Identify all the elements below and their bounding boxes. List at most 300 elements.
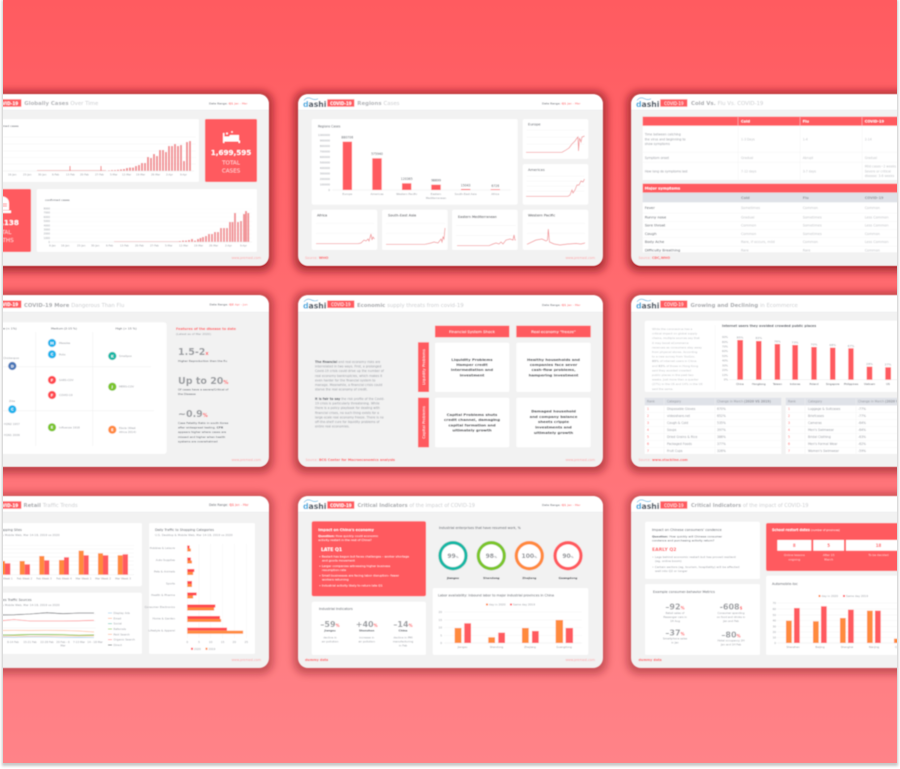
table: growing categories: Packaged Foods xyxy=(667,442,692,446)
panel: industrial indicators: –59% xyxy=(320,620,340,629)
panel: consumer confidence: Impact on Chinese consumers' condence xyxy=(652,528,722,532)
panel: impact on china economy: Impact on China's economy xyxy=(318,528,374,532)
panel: traffic bar chart: Mar Week 2 xyxy=(95,576,111,580)
panel: internet users chart: 70% xyxy=(722,344,728,348)
panel: severity matrix: M xyxy=(50,341,54,345)
table: major symptoms: Cold xyxy=(741,196,750,200)
source note: Source: CDC,WHO xyxy=(638,256,670,260)
panel: consumer behavior metrics xyxy=(645,584,760,655)
panel: automobile-toc chart: day in 2020 xyxy=(822,594,838,598)
table: growing categories xyxy=(645,398,781,454)
panel: confirmed deaths chart: 9-Apr xyxy=(240,244,248,248)
panel: consumer confidence: Question: How quickly will Chinese consumer xyxy=(652,534,722,538)
panel: industrial indicators: air pollution xyxy=(322,640,339,644)
sparkline: Western Pacific: Western Pacific xyxy=(528,214,555,218)
panel: impact on china economy: activity restart in the rest of China? xyxy=(318,538,372,542)
panel: daily traffic categories chart: Lifestyle & Apparel xyxy=(149,628,175,632)
panel: consumer behavior metrics: Passenger cars in xyxy=(663,615,687,619)
panel: automobile-toc chart: 0 xyxy=(774,641,776,645)
panel: severity matrix: High (> 15 %) xyxy=(115,327,137,331)
panel: internet users chart: it may boost eCommerce xyxy=(652,341,689,345)
panel: regions cases bar chart: 880706 xyxy=(341,136,353,140)
table: growing categories: 377% xyxy=(717,442,726,446)
panel: automobile-toc chart: Nanjing xyxy=(869,645,879,649)
table: growing categories: 6 xyxy=(647,442,649,446)
panel: industrial indicators: Industrial Indicators xyxy=(319,607,353,611)
panel: automobile-toc chart: 60 xyxy=(773,607,776,611)
table: growing categories: 5 xyxy=(647,435,649,439)
table: major symptoms: COVID-19 xyxy=(865,196,884,200)
logo dashi: dashi xyxy=(303,302,326,311)
panel: regions cases bar chart: Western Pacific xyxy=(396,192,418,196)
date range: Date Range: Q1 Jan - Mar xyxy=(542,102,581,106)
table: major symptoms: Common xyxy=(803,240,818,244)
panel: daily traffic categories chart xyxy=(145,523,255,654)
panel: severity matrix: MERS-COV xyxy=(119,385,134,389)
panel: severity matrix: D xyxy=(11,364,14,368)
table: major symptoms: Gradual xyxy=(741,216,754,220)
panel: school restart dates: To be decided xyxy=(868,553,889,557)
panel: labor availability chart: 0 xyxy=(440,641,442,645)
panel: industrial indicators: in Feb xyxy=(399,644,407,648)
panel: labor availability chart xyxy=(433,588,588,655)
table: growing categories: 326% xyxy=(717,449,726,453)
panel: automobile-toc chart: Beijing xyxy=(815,645,825,649)
panel: regions cases bar chart: 700000 xyxy=(320,150,330,154)
text: features of the disease: 1.5-2x xyxy=(178,347,209,358)
cell: capital financial: credit channel, damaging xyxy=(444,417,500,422)
panel: severity matrix: Smallpox xyxy=(119,354,132,358)
panel: impact on china economy xyxy=(312,521,426,596)
gauge: Jiangsu: 99% xyxy=(447,553,459,560)
logo dashi: dashi xyxy=(303,502,326,511)
gauge: Shandong: Shandong xyxy=(483,576,499,580)
panel: daily cases chart: 13-Feb xyxy=(66,172,75,176)
gauge: Guangdong xyxy=(555,543,581,580)
panel: internet users chart: 0% xyxy=(724,378,728,382)
header badge: COVID-19 xyxy=(331,302,351,307)
panel: severity matrix: E xyxy=(111,428,114,432)
table: declining categories: Men's Swimwear xyxy=(808,428,835,432)
panel: confirmed deaths chart: 16-Jan xyxy=(61,244,70,248)
panel: slide regions cases xyxy=(294,91,607,272)
header badge xyxy=(0,99,21,107)
panel: automobile-toc chart: Shanghai xyxy=(841,645,854,649)
panel: labor availability chart: Shandong xyxy=(490,645,504,649)
panel: consumer behavior metrics: Example consumer-behavior Metrics xyxy=(653,590,715,594)
table: declining categories: -64% xyxy=(858,428,866,432)
panel: traffic sources line chart: 22-28 Feb xyxy=(40,640,54,644)
text: features of the disease xyxy=(176,327,237,444)
table: major symptoms: Less Common xyxy=(865,216,889,220)
panel: daily traffic categories chart: Health & Pharma xyxy=(151,593,175,597)
column header: real economy freeze: Real economy "freeze" xyxy=(531,329,576,334)
panel: confirmed deaths chart: 20-Feb xyxy=(135,244,144,248)
panel: regions cases bar chart: 0 xyxy=(328,188,330,192)
panel: consumer confidence: (eg, online boom) xyxy=(655,559,682,563)
panel: traffic sources line chart: 8-14 Feb xyxy=(7,640,19,644)
panel: confirmed deaths chart: confirmed cases xyxy=(45,198,70,202)
panel: regions cases bar chart: South-East Asia xyxy=(455,192,477,196)
heading: industrial enterprises: Industrial enterprises that have resumed work, % xyxy=(439,526,521,530)
table: major symptoms: Sometimes xyxy=(803,216,822,220)
panel: daily cases chart: 19-Mar xyxy=(136,172,146,176)
panel: traffic sources line chart xyxy=(0,593,142,654)
panel: confirmed deaths chart: 1000 xyxy=(44,236,50,240)
panel: consumer behavior metrics: on food and drinks in xyxy=(717,615,746,619)
panel: traffic sources line chart: Direct xyxy=(114,643,123,647)
panel: automobile-toc chart: 50 xyxy=(773,613,776,617)
panel: labor availability chart: Labor availability: Inbound labor to major industrial provinces in China xyxy=(438,594,554,598)
gauge: Zhejiang: 100% xyxy=(522,553,537,560)
panel: internet users chart: said they avoided crowded xyxy=(652,368,691,372)
table: timing comparison: How long do symptoms last xyxy=(645,169,688,173)
panel: industrial indicators: manufacturing xyxy=(393,640,413,644)
panel: internet users chart: 27% xyxy=(885,363,891,367)
panel: internet users chart: Philippines xyxy=(844,382,859,386)
panel: consumer behavior metrics: –80% xyxy=(721,630,741,640)
sparkline: Europe: Europe xyxy=(528,122,541,126)
row header: liquidity problems xyxy=(418,342,429,392)
panel: daily traffic categories chart: 5 xyxy=(198,640,200,644)
panel: internet users chart: 30% xyxy=(722,363,728,367)
table: declining categories: Bridal Clothing xyxy=(808,435,831,439)
panel: daily traffic categories chart: Pets & Animals xyxy=(154,570,176,574)
table: timing comparison: 7-12 days xyxy=(741,169,757,173)
panel: confirmed deaths chart: 3000 xyxy=(44,228,50,232)
table: major symptoms: Major symptoms xyxy=(645,185,681,190)
panel: daily traffic categories chart: 2020 xyxy=(194,647,201,651)
gauge: Shandong: 98% xyxy=(486,553,497,560)
panel: impact on china economy: • Small businesses are facing labor disruption– fewer xyxy=(319,574,400,578)
cell: liquidity financial: investment xyxy=(460,372,485,378)
panel: daily cases chart: 20-Feb xyxy=(80,172,89,176)
panel: daily traffic categories chart: Auto Supplies xyxy=(156,558,176,562)
text: economic explanation: financial crises, no such thing exists for a xyxy=(315,411,379,415)
panel: traffic bar chart xyxy=(0,523,142,586)
panel: internet users chart: 60% xyxy=(722,349,728,353)
panel: labor availability chart: Jiangsu xyxy=(457,645,468,649)
cell: liquidity real economy: cash-flow problems, xyxy=(531,367,576,372)
table: major symptoms: Difficulty Breathing xyxy=(645,248,680,252)
panel: traffic bar chart: Feb Week 4 xyxy=(56,576,72,580)
table: growing categories: videoshare.net xyxy=(667,414,691,418)
panel: consumer confidence: • Lags behind economic restart but has proved resilient xyxy=(652,555,737,559)
panel: daily cases chart: 30-Jan xyxy=(38,172,47,176)
panel: confirmed deaths chart: 4000 xyxy=(44,223,50,227)
table: timing comparison: Severe or critical xyxy=(865,169,891,173)
panel: internet users chart: 90% xyxy=(722,335,728,339)
panel: school restart dates: After 15 xyxy=(823,553,835,557)
cell: liquidity real economy: Healthy households and xyxy=(527,357,580,362)
cell: capital financial xyxy=(435,398,509,447)
text: economic explanation: off-the-shelf cure for liquidity problems of xyxy=(315,420,380,424)
panel: regions cases bar chart: 300000 xyxy=(320,172,330,176)
panel: total cases tile: TOTAL xyxy=(221,160,241,166)
panel: consumer behavior metrics: Jan and Feb xyxy=(722,619,739,623)
panel: daily traffic categories chart: 0 xyxy=(186,640,188,644)
panel: severity matrix: F xyxy=(51,393,54,397)
text: economic explanation: entire real economies. xyxy=(315,425,350,429)
panel: school restart dates: 8 xyxy=(793,543,796,548)
sparkline: Africa: Africa xyxy=(317,213,327,217)
source note: Source: WHO xyxy=(305,256,328,260)
table: timing comparison: Gradual xyxy=(865,156,877,160)
panel: consumer confidence: condence and purchasing activity return? xyxy=(652,538,715,542)
panel: traffic sources line chart: 14 - 18 Mar xyxy=(87,640,104,644)
panel: severity matrix: Measles xyxy=(59,341,71,345)
sparkline: Western Pacific xyxy=(523,210,588,250)
panel: internet users chart: Hongkong xyxy=(752,382,766,386)
column header: financial system shock xyxy=(435,326,509,337)
panel: consumer confidence xyxy=(645,522,760,579)
panel: internet users chart: 73% xyxy=(792,340,798,344)
table: growing categories: Soups xyxy=(667,428,677,432)
sparkline: Eastern Mediterranean xyxy=(452,210,518,250)
header badge: COVID-19 xyxy=(330,503,352,508)
table: growing categories: 397% xyxy=(717,428,726,432)
table: growing categories: 535% xyxy=(717,421,726,425)
panel: consumer behavior metrics: in Jan xyxy=(671,640,679,644)
panel: regions cases bar chart: 100000 xyxy=(320,182,330,186)
table: declining categories: 2 xyxy=(788,414,790,418)
panel: school restart dates: Online lessons xyxy=(784,553,805,557)
panel: traffic sources line chart: 15-21 Feb xyxy=(23,640,37,644)
table: growing categories: 4 xyxy=(647,428,649,432)
panel: internet users chart: Poland xyxy=(810,382,819,386)
table: timing comparison: show symptoms xyxy=(645,142,670,146)
panel: impact on china economy: and goods movement xyxy=(322,558,356,562)
panel: daily traffic categories chart: Daily Traffic to Shopping Categories xyxy=(155,528,214,532)
panel: severity matrix xyxy=(0,322,167,454)
source note: Source: BCG Center for Macroeconomics analysis xyxy=(306,458,395,462)
header badge: COVID-19 xyxy=(330,101,352,106)
slide title: Globally Cases Over Time xyxy=(24,101,99,107)
panel: automobile-toc chart: 10 xyxy=(773,636,776,640)
panel: internet users chart: weeks. Just more than a quarter xyxy=(652,378,699,382)
panel: confirmed deaths chart xyxy=(37,189,257,252)
table: growing categories: 386% xyxy=(717,435,726,439)
panel: traffic sources line chart: Paid Search xyxy=(114,632,130,636)
panel: regions cases bar chart xyxy=(312,119,518,205)
panel: traffic sources line chart: 29 Feb - 6 xyxy=(56,640,70,644)
text: economic explanation: even harder for the financial system to xyxy=(315,378,376,382)
panel: confirmed deaths chart: 23-Jan xyxy=(77,244,86,248)
table: major symptoms: Runny nose xyxy=(645,216,667,220)
text: economic explanation: starve the real economy of credit. xyxy=(315,388,368,392)
column header: real economy freeze xyxy=(516,326,591,337)
panel: severity matrix: Zika xyxy=(9,399,15,403)
table: declining categories: -59% xyxy=(858,449,866,453)
logo dashi: dashi xyxy=(303,100,326,109)
panel: severity matrix: C xyxy=(51,353,54,357)
panel: impact on china economy: • Larger companies witnessing higher business xyxy=(319,564,391,568)
sparkline: Africa xyxy=(312,210,377,250)
date range: Date Range: Q1 Jan - Mar xyxy=(209,102,248,106)
panel: industrial indicators: +40% xyxy=(356,620,378,629)
panel: internet users chart: chains, multiple sources say that xyxy=(652,336,701,340)
table: declining categories: Cameras xyxy=(808,421,822,425)
cell: capital financial: Capital Problems shuts xyxy=(447,412,498,417)
panel: school restart dates: 18 xyxy=(876,543,881,548)
text: economic explanation: The financial xyxy=(315,360,337,364)
panel: consumer confidence: EARLY Q2 xyxy=(652,547,676,553)
table: major symptoms: Sometimes xyxy=(803,224,822,228)
panel: daily traffic categories chart: 25 xyxy=(245,640,248,644)
panel: confirmed deaths chart: 5000 xyxy=(44,219,50,223)
table: declining categories: 3 xyxy=(788,421,790,425)
cell: liquidity financial: intermediation and xyxy=(451,367,493,372)
panel: daily traffic categories chart: Sports xyxy=(166,582,176,586)
panel: regions cases bar chart: 600000 xyxy=(320,155,330,159)
panel: internet users chart: 67% xyxy=(848,344,854,348)
panel: confirmed deaths chart: 19-Mar xyxy=(194,244,204,248)
table: timing comparison: 1-4 xyxy=(803,137,808,141)
panel: daily traffic categories chart: 10 xyxy=(209,640,213,644)
table: major symptoms: Common xyxy=(741,232,756,236)
cell: capital real economy: sheets cripple xyxy=(538,419,569,424)
header badge xyxy=(660,99,687,107)
panel: internet users chart: to a new survey from YouGov, xyxy=(652,355,695,359)
panel: consumer behavior metrics: Hotel occupancy 2H xyxy=(718,638,744,642)
panel: labor availability chart: Zhejiang xyxy=(524,645,536,649)
gauge: Jiangsu: Jiangsu xyxy=(446,576,459,580)
panel: regions cases bar chart: 98699 xyxy=(431,178,441,182)
panel: confirmed deaths chart: 0 xyxy=(48,240,50,244)
panel: school restart dates xyxy=(766,523,900,571)
source note: dummy data xyxy=(638,658,662,662)
panel: consumer behavior metrics: Retail sales of xyxy=(666,611,684,615)
table: major symptoms: Rare, if occurs, mild xyxy=(741,240,775,244)
text: features of the disease: Of cases have a severe/Critical of xyxy=(178,388,229,392)
panel: confirmed deaths chart: 26-Mar xyxy=(209,244,219,248)
panel: internet users chart: and 83% of those in Hong Kong xyxy=(652,364,698,368)
panel: industrial indicators: Shenzhen xyxy=(359,628,374,632)
gauge: Jiangsu xyxy=(440,543,466,580)
panel: traffic sources line chart: Mar xyxy=(60,644,66,648)
table: declining categories: Category xyxy=(808,400,822,404)
table: declining categories: 7 xyxy=(788,449,790,453)
table: major symptoms: Common xyxy=(865,232,880,236)
text: features of the disease: missed and higher when health xyxy=(178,435,225,439)
panel: impact on china economy: workers returning xyxy=(322,578,349,582)
panel: regions cases bar chart: 200000 xyxy=(320,177,330,181)
table: declining categories: Luggage & Suitcases xyxy=(808,407,841,411)
panel: consumer behavior metrics: Jan and 1H Feb xyxy=(720,642,741,646)
panel: severity matrix: H1N1 2009 xyxy=(4,433,20,437)
panel: slide cold vs flu vs covid xyxy=(627,91,900,272)
panel: regions cases bar chart: Eastern xyxy=(431,192,442,196)
table: major symptoms: Cough xyxy=(645,232,657,236)
text: economic explanation: real economy bankruptcies, which makes it xyxy=(315,374,383,378)
panel: automobile-toc chart xyxy=(766,576,900,655)
panel: internet users chart: 85% of internet users in China xyxy=(652,359,696,363)
panel: consumer behavior metrics: Consumer spending xyxy=(718,611,745,615)
panel: internet users chart: While the coronavirus has a xyxy=(652,327,692,331)
panel: severity matrix: SARS-COV xyxy=(59,378,74,382)
table: growing categories: 2 xyxy=(647,414,649,418)
panel: internet users chart: public places in the past two xyxy=(652,373,694,377)
panel: daily traffic categories chart: Consumer Electronics xyxy=(145,605,176,609)
panel: consumer behavior metrics: –37% xyxy=(665,628,685,638)
panel: traffic sources line chart: Organic Search xyxy=(114,638,135,642)
header badge xyxy=(327,99,354,107)
table: timing comparison xyxy=(643,117,900,180)
table: growing categories: Cough & Cold xyxy=(667,421,688,425)
panel: internet users chart: 40% xyxy=(722,359,728,363)
header badge xyxy=(327,300,354,308)
table: major symptoms: Sometimes xyxy=(803,232,822,236)
panel: severity matrix: K xyxy=(111,354,114,358)
panel: consumer confidence: well into Q2 or longer xyxy=(655,569,688,573)
panel: daily cases chart: 5-Mar xyxy=(110,172,118,176)
table: major symptoms: Rare xyxy=(803,248,810,252)
table: major symptoms: Flu xyxy=(803,196,809,200)
text: economic explanation: Covid-19 crisis could drive up the number of xyxy=(315,369,385,373)
panel: slide globally cases over time xyxy=(0,91,273,272)
cell: liquidity real economy: hampering investment xyxy=(529,372,579,378)
text: features of the disease: Up to 20% xyxy=(178,376,228,387)
footer link: www.premast.com xyxy=(231,458,261,462)
panel: internet users chart: revenues as consumers stay away xyxy=(652,345,702,349)
panel: traffic sources line chart: 7-13 Mar xyxy=(73,640,86,644)
panel: labor availability chart: Same day 2019 xyxy=(513,603,535,607)
table: major symptoms: Sometimes xyxy=(741,206,760,210)
table: major symptoms: Common xyxy=(865,206,880,210)
panel: slide retail traffic trends xyxy=(0,493,273,674)
header badge: COVID-19 xyxy=(664,101,684,106)
column header: financial system shock: Financial System Shock xyxy=(449,329,496,334)
panel: internet users chart: Singapore xyxy=(826,382,840,386)
slide title: Growing and Declining in Ecommerce xyxy=(690,303,798,309)
sparkline: Europe xyxy=(523,119,588,159)
text: features of the disease: Higher Reproduction than the flu xyxy=(178,359,227,363)
panel: regions cases bar chart: 500000 xyxy=(320,160,330,164)
panel: internet users chart: 28% xyxy=(866,362,873,366)
table: major symptoms: Less Common xyxy=(865,224,889,228)
cell: capital real economy: investments and xyxy=(535,424,572,430)
table: major symptoms: Common xyxy=(865,248,880,252)
header badge xyxy=(0,300,21,308)
table: timing comparison: Mild cases~2 weeks xyxy=(865,164,896,168)
table: declining categories xyxy=(786,398,900,454)
header badge xyxy=(660,300,687,308)
table: declining categories: 1 xyxy=(788,407,790,411)
panel: traffic bar chart: Mar Week 1 xyxy=(76,576,92,580)
text: economic explanation: there is a policy playbook for dealing with xyxy=(315,406,380,410)
panel: consumer behavior metrics: 1H Aug xyxy=(670,619,680,623)
panel: confirmed deaths chart: 5-Mar xyxy=(165,244,173,248)
table: declining categories: 5 xyxy=(788,435,790,439)
table: timing comparison: Cold xyxy=(741,119,750,123)
panel: confirmed deaths chart: 6-Feb xyxy=(106,244,114,248)
logo dashi: dashi xyxy=(636,302,659,311)
table: declining categories: Men's Formal Wear xyxy=(808,442,838,446)
panel: automobile-toc chart: 40 xyxy=(773,618,776,622)
panel: labor availability chart: Guangdong xyxy=(556,645,572,649)
row header: capital problems: Capital Problems xyxy=(421,406,426,439)
table: major symptoms xyxy=(643,184,900,252)
slide title: Regions Cases xyxy=(357,101,400,107)
panel: regions cases bar chart: Regions Cases xyxy=(318,124,341,128)
sparkline: Americas: Americas xyxy=(528,168,545,172)
cell: capital financial: ultimately growth xyxy=(452,428,492,432)
panel: severity matrix: C xyxy=(11,408,14,412)
panel: industrial indicators: –14% xyxy=(393,620,413,629)
panel: slide critical indicators consumers xyxy=(627,493,900,674)
table: growing categories: Category xyxy=(667,400,681,404)
text: economic explanation: the risk profile of the Covid- xyxy=(340,397,384,401)
